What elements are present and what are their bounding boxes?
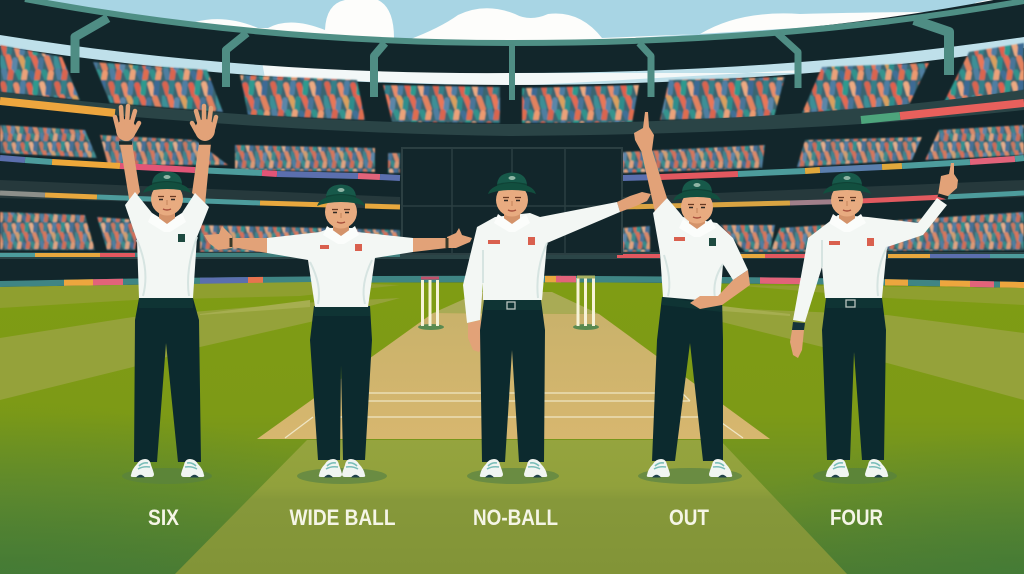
raised arms [120,143,211,205]
centre strip [175,440,847,574]
shirt [793,198,947,322]
trousers [134,298,201,462]
stumps right [573,277,599,330]
badges [488,237,535,245]
grass base [0,282,1024,574]
pitch [257,313,770,439]
shirt [653,198,748,302]
trousers [652,297,723,461]
upper beam stripes [0,101,1024,120]
middle colour stripes [0,158,1024,178]
belt [314,306,370,316]
label: six: SIX [148,505,179,530]
belt [826,298,882,308]
stumps left [418,278,444,330]
middle tier crowd [0,125,1024,173]
outstretched arms [232,238,447,253]
belt [484,300,541,310]
shoes [480,459,547,478]
lower rail colours [0,255,1024,256]
badges [829,238,874,246]
umpire: six [115,106,216,484]
shadow [122,468,212,484]
wristbands [119,141,211,145]
buckle [507,302,515,309]
umpire: no-ball [463,172,651,484]
collar [148,213,186,232]
buckle [846,300,855,307]
scoreboard [402,148,622,254]
shirt [125,192,209,298]
cuff [792,322,805,330]
head and hat [673,180,721,235]
badges [320,244,362,251]
hands [204,226,472,250]
shirt folds [664,255,723,298]
raised arm [641,150,667,212]
belt [139,298,193,308]
upper beam [0,90,1024,136]
collar [679,219,716,237]
head and hat [317,184,365,240]
lower tier crowd [0,212,1024,252]
shadow [467,468,559,484]
badge [178,234,185,242]
stand dark backdrop [0,46,1024,287]
mown stripes left [0,282,400,400]
shadow [297,468,387,484]
white glow behind stands [262,62,800,86]
hand extended [617,192,651,212]
lower colour stripes [0,193,1024,207]
wristband [938,195,948,198]
mown stripes right [722,285,1024,400]
hand lowered [468,320,483,352]
collar [829,214,866,232]
label: out: OUT [669,505,709,530]
shoes [131,459,204,478]
roof pillars [75,18,949,100]
lower left corner shade [0,400,420,574]
raised hand with finger [938,163,958,196]
head and hat [143,172,191,227]
label: wide ball: WIDE BALL [290,505,396,530]
pitch far end [433,292,599,314]
shoes [319,459,365,478]
cricket field [0,268,1024,574]
label: four: FOUR [830,505,883,530]
collar [494,214,530,232]
shirt folds [822,240,887,296]
shadow [813,468,897,484]
upper tier crowd [0,43,1024,123]
boundary advertising stripe [0,276,1024,288]
head and hat [488,172,536,228]
sky [0,0,1024,110]
stadium stand structure [0,0,1024,287]
shirt [267,228,413,307]
raised hand with finger [634,112,654,151]
lower beam [0,180,1024,209]
shoes [647,459,732,478]
lower stand rail [0,252,1024,259]
badges [674,237,685,241]
shirt folds [310,260,372,304]
umpire: four [790,163,958,484]
shirt folds [483,243,547,298]
wristbands [231,238,447,248]
collar [323,226,359,244]
trousers [480,300,545,462]
lowered hand [790,330,804,358]
roof [0,0,1024,73]
hands [115,106,216,141]
belt [662,297,722,312]
shoes [826,459,888,478]
lower right corner shade [700,430,1024,574]
label: no-ball: NO-BALL [473,505,558,530]
umpire: out [634,112,750,484]
crease lines [285,393,743,438]
shirt folds [137,237,197,296]
umpire: wide ball [204,184,472,484]
roof underside band [0,35,1024,88]
trousers [310,306,372,460]
shadow [638,468,742,484]
bent arm and hand [690,270,750,309]
roof edge [25,0,1024,43]
clouds [195,0,1010,40]
shirt [463,202,620,323]
head and hat [823,172,871,228]
trousers [822,298,886,460]
